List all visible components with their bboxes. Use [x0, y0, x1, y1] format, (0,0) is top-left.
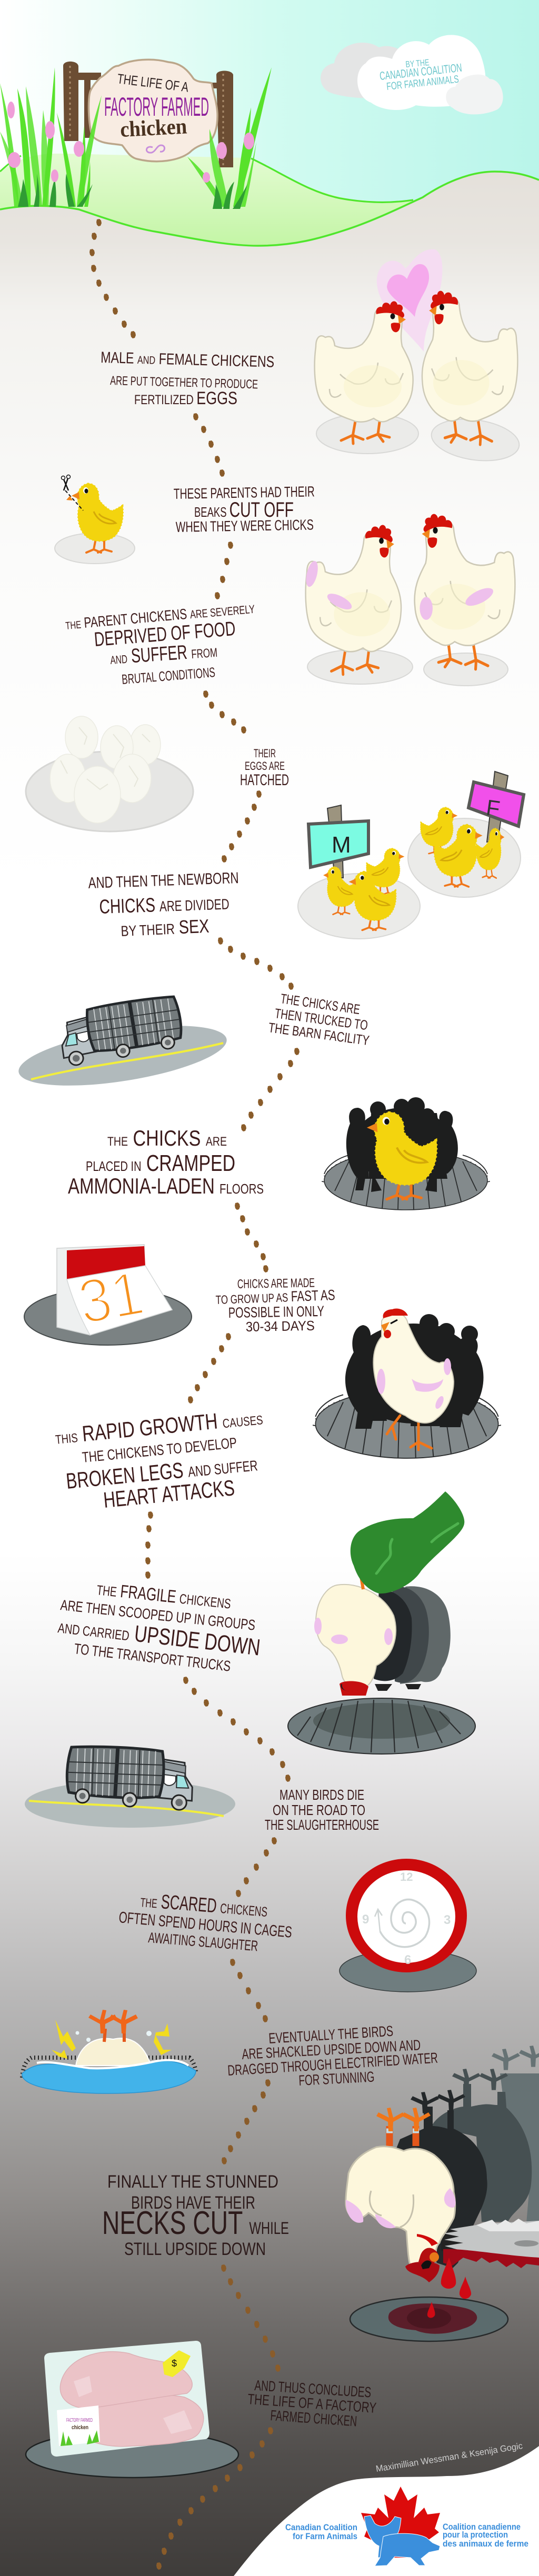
heart [377, 249, 442, 352]
step 9 text: THE CHICKENS TO DEVELOP [82, 1435, 237, 1466]
sign text: chicken [119, 114, 187, 142]
back cloud [321, 43, 416, 98]
sky background [0, 0, 539, 221]
step 7 text [68, 1126, 264, 1198]
right parent hen [415, 514, 515, 669]
step 14 text: STILL UPSIDE DOWN [124, 2239, 266, 2259]
female chicks with sign [408, 771, 524, 897]
step 6 text: THE CHICKS ARE [280, 990, 361, 1017]
step 2 text [174, 483, 315, 535]
lightning bolts [52, 2020, 172, 2059]
step 8 text: TO GROW UP AS FAST AS [215, 1287, 335, 1307]
step 13 text [227, 2023, 438, 2089]
step 5 text: CHICKS ARE DIVIDED [99, 891, 229, 918]
logo text left [285, 2522, 357, 2541]
step 15 text: THE LIFE OF A FACTORY [247, 2391, 377, 2416]
F sign: F [485, 795, 502, 821]
step 1 text: ARE PUT TOGETHER TO PRODUCE [110, 374, 258, 392]
byline [379, 57, 463, 93]
icon: scissors [61, 475, 71, 490]
clock numbers: 9 [362, 1912, 369, 1927]
white hen upside down [314, 1585, 396, 1696]
logo text left: Canadian Coalition [285, 2522, 357, 2532]
step 15 text: FARMED CHICKEN [270, 2407, 357, 2429]
clock numbers: 6 [404, 1953, 411, 1967]
step 15 text: AND THUS CONCLUDES [254, 2377, 372, 2401]
step 6 text: THE BARN FACILITY [267, 1019, 370, 1048]
F sign [468, 771, 524, 842]
chicken breasts [60, 2352, 204, 2447]
step 14 text: FINALLY THE STUNNED [107, 2172, 278, 2192]
step 10 text: TO THE TRANSPORT TRUCKS [73, 1640, 232, 1675]
barn floor [288, 1698, 475, 1754]
step 1 text [101, 349, 275, 408]
front cloud [357, 35, 485, 110]
step 10 text: ARE THEN SCOOPED UP IN GROUPS [59, 1597, 256, 1633]
step 9 text: THIS RAPID GROWTH CAUSES [54, 1404, 264, 1449]
slaughtered hen with saw [346, 2108, 539, 2341]
head and blood [405, 2248, 440, 2282]
parent hens with plucked patches [304, 514, 515, 686]
mini label: FACTORY FARMED [66, 2418, 93, 2423]
price tag [163, 2350, 191, 2377]
step 5 text: AND THEN THE NEWBORN [88, 869, 239, 892]
saw [441, 2219, 539, 2268]
step 13 text: ARE SHACKLED UPSIDE DOWN AND [242, 2037, 421, 2062]
right hen [422, 291, 517, 445]
step 1 text: MALE AND FEMALE CHICKENS [101, 349, 275, 371]
step 4 text: EGGS ARE [245, 759, 285, 773]
step 9 text [54, 1404, 264, 1512]
step 7 text: AMMONIA-LADEN FLOORS [68, 1174, 264, 1198]
black hens [346, 1097, 458, 1192]
shadows [307, 649, 413, 684]
step 1 text: FERTILIZED EGGS [134, 388, 237, 408]
hen body [346, 2147, 455, 2272]
step 3 text: AND SUFFER FROM [109, 639, 218, 669]
title sign: FACTORY FARMED [104, 92, 209, 122]
step 14 text: NECKS CUT WHILE [102, 2205, 289, 2241]
cloud with byline [321, 35, 503, 114]
medium silhouette [432, 2069, 532, 2222]
byline: FOR FARM ANIMALS [386, 74, 460, 93]
small cloud [446, 75, 503, 114]
step 5 text [88, 869, 239, 940]
broken-legged hen in crowded barn [315, 1308, 498, 1458]
truck to slaughterhouse with road [25, 1746, 235, 1828]
floor with blood pool [350, 2297, 508, 2341]
step 3 text: DEPRIVED OF FOOD [93, 618, 236, 651]
dark silhouette [395, 2090, 487, 2268]
byline: CANADIAN COALITION [379, 61, 463, 83]
M sign [308, 805, 368, 878]
packaged chicken [26, 2341, 238, 2478]
mini label [57, 2405, 100, 2446]
step 8 text: CHICKS ARE MADE [237, 1276, 315, 1291]
clock [340, 1859, 476, 1992]
sign text [104, 71, 209, 142]
shadows [316, 414, 418, 454]
step 3 text [65, 600, 255, 687]
step 8 text [215, 1276, 335, 1335]
step 9 text: BROKEN LEGS AND SUFFER [65, 1450, 258, 1494]
white hen [373, 1308, 454, 1450]
footprint trail [89, 219, 300, 2570]
left parent hen [304, 525, 401, 675]
step 4 text: THEIR [254, 747, 276, 760]
footer white corner [234, 2446, 539, 2576]
byline: BY THE [405, 57, 430, 69]
truck to barn with road [15, 995, 231, 1097]
step 7 text: PLACED IN CRAMPED [86, 1150, 235, 1176]
M sign: M [332, 832, 351, 858]
step 10 text [57, 1579, 262, 1675]
step 4 text: HATCHED [240, 771, 289, 789]
sign board [88, 59, 217, 162]
logo text right [443, 2522, 528, 2549]
male chicks with sign [298, 805, 420, 939]
step 9 text: HEART ATTACKS [102, 1475, 236, 1512]
step 2 text: WHEN THEY WERE CHICKS [176, 516, 314, 535]
step 8 text: 30-34 DAYS [246, 1318, 315, 1335]
hatching eggs [26, 716, 193, 831]
step 4 text [240, 747, 289, 789]
step 3 text: BRUTAL CONDITIONS [121, 664, 216, 687]
logo text right: pour la protection [443, 2530, 508, 2540]
step 11 text: MANY BIRDS DIE [280, 1787, 364, 1803]
lightest silhouette [492, 2046, 539, 2223]
step 13 text: DRAGGED THROUGH ELECTRIFIED WATER [227, 2050, 438, 2079]
step 8 text: POSSIBLE IN ONLY [228, 1303, 324, 1321]
clock numbers [362, 1870, 451, 1967]
step 11 text: ON THE ROAD TO [273, 1802, 365, 1818]
logo text left: for Farm Animals [293, 2531, 357, 2541]
logo text right: des animaux de ferme [443, 2539, 528, 2549]
grass and flowers left [0, 67, 102, 207]
step 12 text [118, 1889, 293, 1954]
black hens [345, 1314, 484, 1429]
step 2 text: BEAKS CUT OFF [194, 498, 294, 522]
hanging silhouettes [395, 2046, 539, 2268]
step 14 text [102, 2172, 289, 2259]
step 7 text: THE CHICKS ARE [107, 1126, 227, 1150]
stun bath [22, 2010, 196, 2093]
price tag: $ [172, 2358, 177, 2369]
step 6 text: THEN TRUCKED TO [274, 1005, 369, 1033]
logo [285, 2487, 528, 2566]
title sign [63, 59, 233, 167]
step 10 text: AND CARRIED UPSIDE DOWN [57, 1612, 262, 1661]
mini label: chicken [72, 2424, 88, 2431]
left hen [315, 301, 413, 444]
sign posts [63, 62, 233, 167]
step 13 text: FOR STUNNING [298, 2068, 375, 2089]
step 13 text: EVENTUALLY THE BIRDS [268, 2023, 394, 2047]
step 14 text: BIRDS HAVE THEIR [131, 2193, 255, 2213]
step 11 text: THE SLAUGHTERHOUSE [265, 1817, 379, 1833]
shackled feet [376, 2108, 431, 2146]
step 11 text [265, 1787, 379, 1833]
chick in crowded barn [324, 1097, 487, 1210]
clock numbers: 3 [444, 1913, 451, 1927]
step 12 text: THE SCARED CHICKENS [139, 1889, 268, 1921]
green glove [351, 1491, 464, 1593]
hand carrying chickens upside down [288, 1491, 475, 1754]
grey silhouettes [400, 1586, 451, 1684]
step 5 text: BY THEIR SEX [121, 915, 209, 940]
step 10 text: THE FRAGILE CHICKENS [96, 1579, 232, 1613]
sign text: THE LIFE OF A [116, 71, 189, 95]
chick with scissors [55, 475, 135, 564]
clock numbers: 12 [400, 1870, 413, 1883]
step 6 text [267, 990, 370, 1048]
calendar 31 days [24, 1245, 192, 1345]
grass and flowers right [187, 67, 272, 209]
credits: Maximillian Wessman & Ksenija Gogic [375, 2441, 524, 2474]
step 2 text: THESE PARENTS HAD THEIR [174, 483, 315, 502]
maple leaf [361, 2487, 440, 2558]
step 12 text: AWAITING SLAUGHTER [148, 1929, 258, 1954]
step 15 text [247, 2377, 377, 2429]
chicken pair [315, 291, 522, 466]
pig silhouette [375, 2533, 440, 2566]
step 12 text: OFTEN SPEND HOURS IN CAGES [118, 1909, 293, 1941]
logo text right: Coalition canadienne [443, 2522, 521, 2532]
step 3 text: THE PARENT CHICKENS ARE SEVERELY [65, 600, 255, 633]
hen silhouette [364, 2515, 401, 2558]
blood drops [427, 2258, 471, 2318]
calendar 31 days: 31 [74, 1258, 149, 1338]
sign flourish [146, 145, 165, 153]
